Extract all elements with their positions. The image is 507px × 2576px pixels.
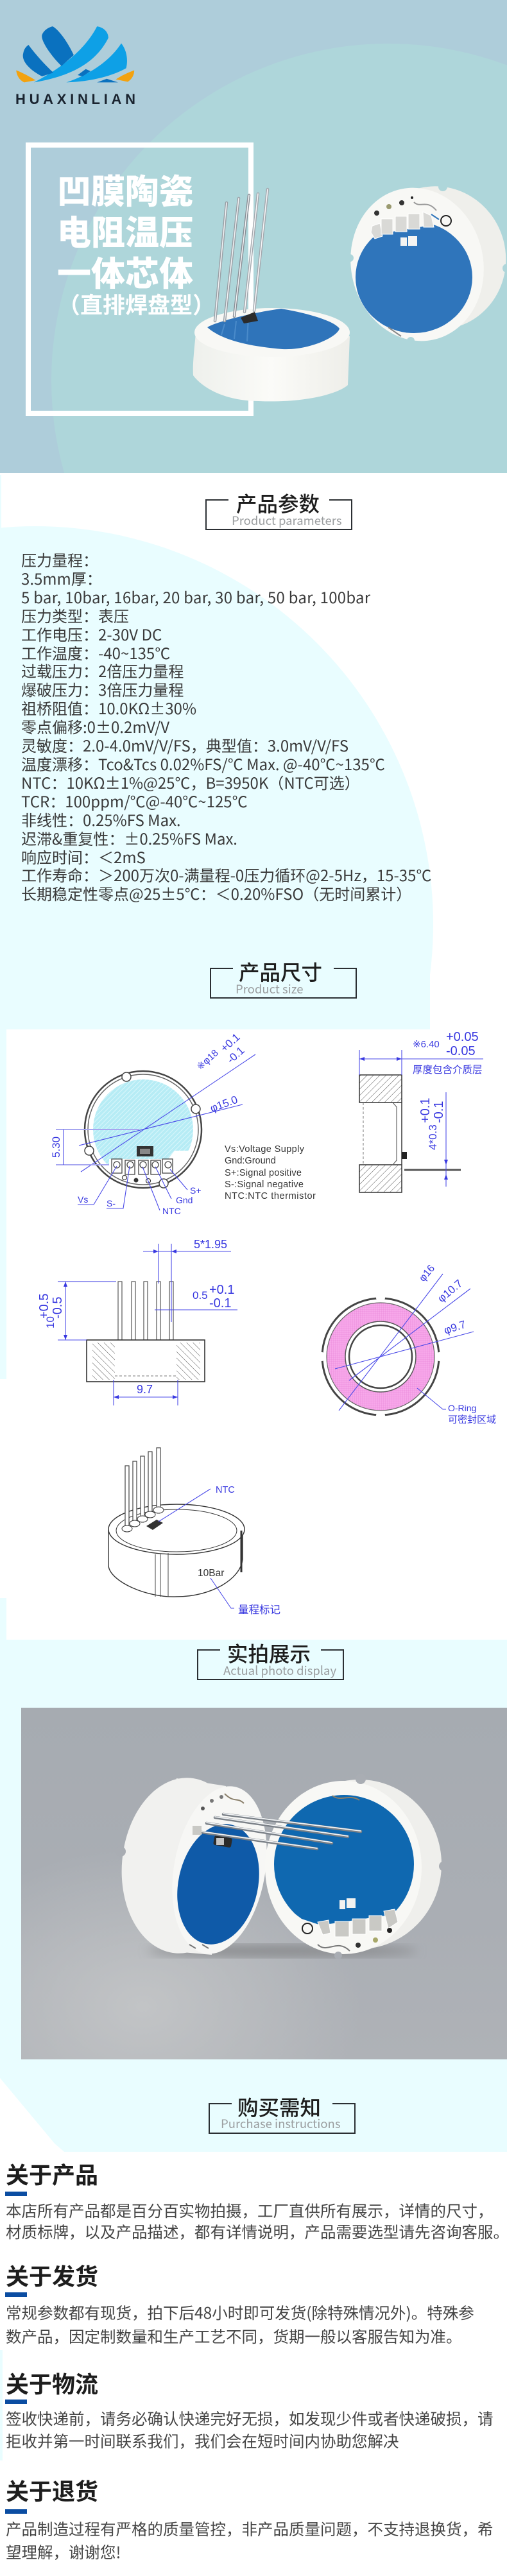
drawing: pin front view: -0.1 <box>209 1296 231 1310</box>
drawing: isometric sensor view: 10Bar <box>198 1568 224 1579</box>
heading: product parameters: 产品参数 <box>236 488 320 518</box>
parameter list: 零点偏移:0±0.2mV/V <box>21 715 169 737</box>
parameter list: 过载压力：2倍压力量程 <box>21 659 184 682</box>
drawing: isometric sensor view: 量程标记 <box>238 1601 280 1617</box>
heading: product size: 产品尺寸 <box>239 956 322 986</box>
drawing: O-ring sealing area: φ10.7 <box>435 1277 465 1305</box>
parameter list: 3.5mm厚： <box>21 567 102 589</box>
parameter list: NTC：10KΩ±1%@25℃，B=3950K（NTC可选） <box>21 771 360 793</box>
heading: product parameters <box>205 488 352 530</box>
drawing: isometric sensor view: NTC <box>216 1485 235 1495</box>
parameter list: 非线性：0.25%FS Max. <box>21 808 181 830</box>
drawing: top view with pads: +0.1 <box>218 1031 243 1054</box>
parameter list: TCR：100ppm/℃@-40℃~125℃ <box>21 789 248 812</box>
parameter list: 长期稳定性零点@25±5℃：＜0.20%FSO（无时间累计） <box>21 882 411 904</box>
hero background circle <box>51 44 507 717</box>
panel: product photo <box>21 1708 507 2059</box>
parameter list: 迟滞&重复性：±0.25%FS Max. <box>21 827 237 849</box>
drawing: top view with pads: Gnd <box>176 1195 193 1205</box>
section: about logistics: 拒收并第一时间联系我们，我们会在短时间内协助您解决 <box>6 2430 399 2452</box>
logo <box>15 26 135 107</box>
parameter list: 工作寿命：＞200万次0-满量程-0压力循环@2-5Hz，15-35℃ <box>21 863 431 886</box>
heading: purchase instructions: 购买需知 <box>237 2091 321 2122</box>
photo: left sensor <box>114 1773 279 1961</box>
hero subtitle: （直排焊盘型） <box>58 288 215 320</box>
drawing: side section view: 4*0.3 <box>427 1124 439 1150</box>
drawing: O-ring sealing area: φ16 <box>417 1263 437 1284</box>
parameter list: 灵敏度：2.0-4.0mV/V/FS，典型值：3.0mV/V/FS <box>21 734 348 756</box>
drawing: side section view: -0.1 <box>432 1101 446 1123</box>
drawing: pin front view: +0.5 <box>37 1294 51 1319</box>
drawing: O-ring sealing area: φ9.7 <box>442 1318 467 1337</box>
photo: right sensor <box>265 1774 449 1959</box>
drawing: top view with pads: 5.30 <box>50 1137 62 1158</box>
accent bar <box>5 2292 27 2297</box>
drawing: side section view <box>359 1030 483 1192</box>
section: about products: 材质标牌，以及产品描述，都有详情说明，产品需要选型请先咨询客服。 <box>6 2220 507 2243</box>
drawing: pin front view: 10 <box>44 1316 56 1328</box>
heading: about products: 关于产品 <box>6 2157 98 2190</box>
hero title <box>57 165 193 296</box>
section: about returns: 望理解，谢谢您! <box>6 2541 121 2563</box>
white title frame <box>26 142 254 416</box>
drawing: O-ring sealing area: O-Ring <box>448 1403 476 1413</box>
text: about products: 本店所有产品都是百分百实物拍摄，工厂直供所有展示，详情的尺寸， <box>6 2199 493 2222</box>
accent bar <box>5 2400 27 2404</box>
legend: pin definitions: NTC:NTC thermistor <box>225 1191 316 1201</box>
legend: pin definitions: S+:Signal positive <box>225 1168 302 1178</box>
parameter list: 工作电压：2-30V DC <box>21 623 162 645</box>
drawing: top view with pads: ※φ18 <box>194 1047 221 1072</box>
text: about shipping: 常规参数都有现货，拍下后48小时即可发货(除特殊情况外)。特殊参 <box>6 2301 474 2324</box>
heading: about shipping: 关于发货 <box>6 2258 98 2292</box>
parameter list: 压力类型：表压 <box>21 604 129 626</box>
photo: pins <box>193 1814 361 1849</box>
drawing: O-ring sealing area: 可密封区域 <box>448 1413 496 1426</box>
drawing: pin front view: +0.1 <box>209 1283 234 1297</box>
section: about returns <box>5 2473 493 2563</box>
drawing: side section view: +0.1 <box>418 1098 433 1123</box>
parameter list: 响应时间：＜2mS <box>21 845 146 868</box>
drawing: top view with pads: S- <box>107 1198 116 1208</box>
parameter list: 爆破压力：3倍压力量程 <box>21 678 184 700</box>
heading: product parameters: Product parameters <box>232 512 342 529</box>
heading: about returns: 关于退货 <box>6 2473 98 2507</box>
panel: hero banner <box>0 0 507 473</box>
drawing: top view with pads: -0.1 <box>225 1044 246 1066</box>
logo: HUAXINLIAN <box>15 91 135 107</box>
accent bar <box>5 2509 27 2514</box>
section: about shipping: 数产品，因定制数量和生产工艺不同，货期一般以客服告知为准。 <box>6 2325 462 2348</box>
panel: dimension drawings <box>37 1030 496 1617</box>
drawing: side section view: 厚度包含介质层 <box>413 1062 483 1076</box>
section: about products <box>5 2157 507 2243</box>
heading: product size <box>210 956 357 999</box>
parameter list <box>21 548 431 904</box>
drawing: pin front view: 0.5 <box>193 1289 208 1301</box>
parameter list: 工作温度：-40~135℃ <box>21 641 170 664</box>
drawing: pin front view: 9.7 <box>137 1383 153 1396</box>
text: about logistics: 签收快递前，请务必确认快递完好无损，如发现少件或者快递破损，请 <box>6 2407 493 2430</box>
section: about logistics <box>5 2366 493 2452</box>
drawing: pin front view: -0.5 <box>51 1297 65 1319</box>
legend: pin definitions: Vs:Voltage Supply <box>225 1144 305 1155</box>
heading: actual photo display: 实拍展示 <box>227 1638 311 1668</box>
drawing: top view with pads: NTC <box>162 1206 181 1216</box>
drawing: side section view: +0.05 <box>446 1030 479 1044</box>
drawing: top view with pads: S+ <box>190 1185 202 1196</box>
parameter list: 压力量程： <box>21 548 98 571</box>
drawing: side section view: ※6.40 <box>413 1039 440 1050</box>
section: about shipping <box>5 2258 474 2348</box>
product photo: right sensor face <box>350 186 506 341</box>
heading: actual photo display <box>197 1638 344 1680</box>
drawing: top view with pads <box>50 1031 255 1216</box>
hero title: 电阻温压 <box>57 206 193 255</box>
drawing: top view with pads: φ15.0 <box>209 1094 239 1115</box>
drawing: top view with pads: Vs <box>78 1194 88 1205</box>
heading: product size: Product size <box>236 981 304 997</box>
photo shadow <box>148 1945 417 1957</box>
hero title: 一体芯体 <box>57 247 193 296</box>
drawing: isometric sensor view <box>108 1448 280 1617</box>
heading: purchase instructions: Purchase instructions <box>221 2115 340 2132</box>
legend: pin definitions: Gnd:Ground <box>225 1156 276 1166</box>
legend: pin definitions <box>225 1144 316 1201</box>
text: about returns: 产品制造过程有严格的质量管控，非产品质量问题，不支持退换货，希 <box>6 2518 493 2540</box>
parameter list: 5 bar, 10bar, 16bar, 20 bar, 30 bar, 50 bar, 100bar <box>21 585 370 608</box>
heading: about logistics: 关于物流 <box>6 2366 98 2400</box>
hero title: 凹膜陶瓷 <box>57 165 193 214</box>
heading: actual photo display: Actual photo display <box>223 1662 336 1679</box>
product photo: left sensor with pins <box>193 187 350 402</box>
drawing: pin front view: 5*1.95 <box>194 1238 227 1251</box>
parameter list: 祖桥阻值：10.0KΩ±30% <box>21 696 196 719</box>
drawing: O-ring sealing area <box>317 1263 496 1426</box>
accent bar <box>5 2192 27 2196</box>
legend: pin definitions: S-:Signal negative <box>225 1180 304 1190</box>
drawing: side section view: -0.05 <box>446 1044 476 1058</box>
parameter list: 温度漂移：Tco&Tcs 0.02%FS/℃ Max. @-40℃~135℃ <box>21 752 385 775</box>
drawing: pin front view <box>37 1238 237 1405</box>
heading: purchase instructions <box>209 2091 356 2134</box>
